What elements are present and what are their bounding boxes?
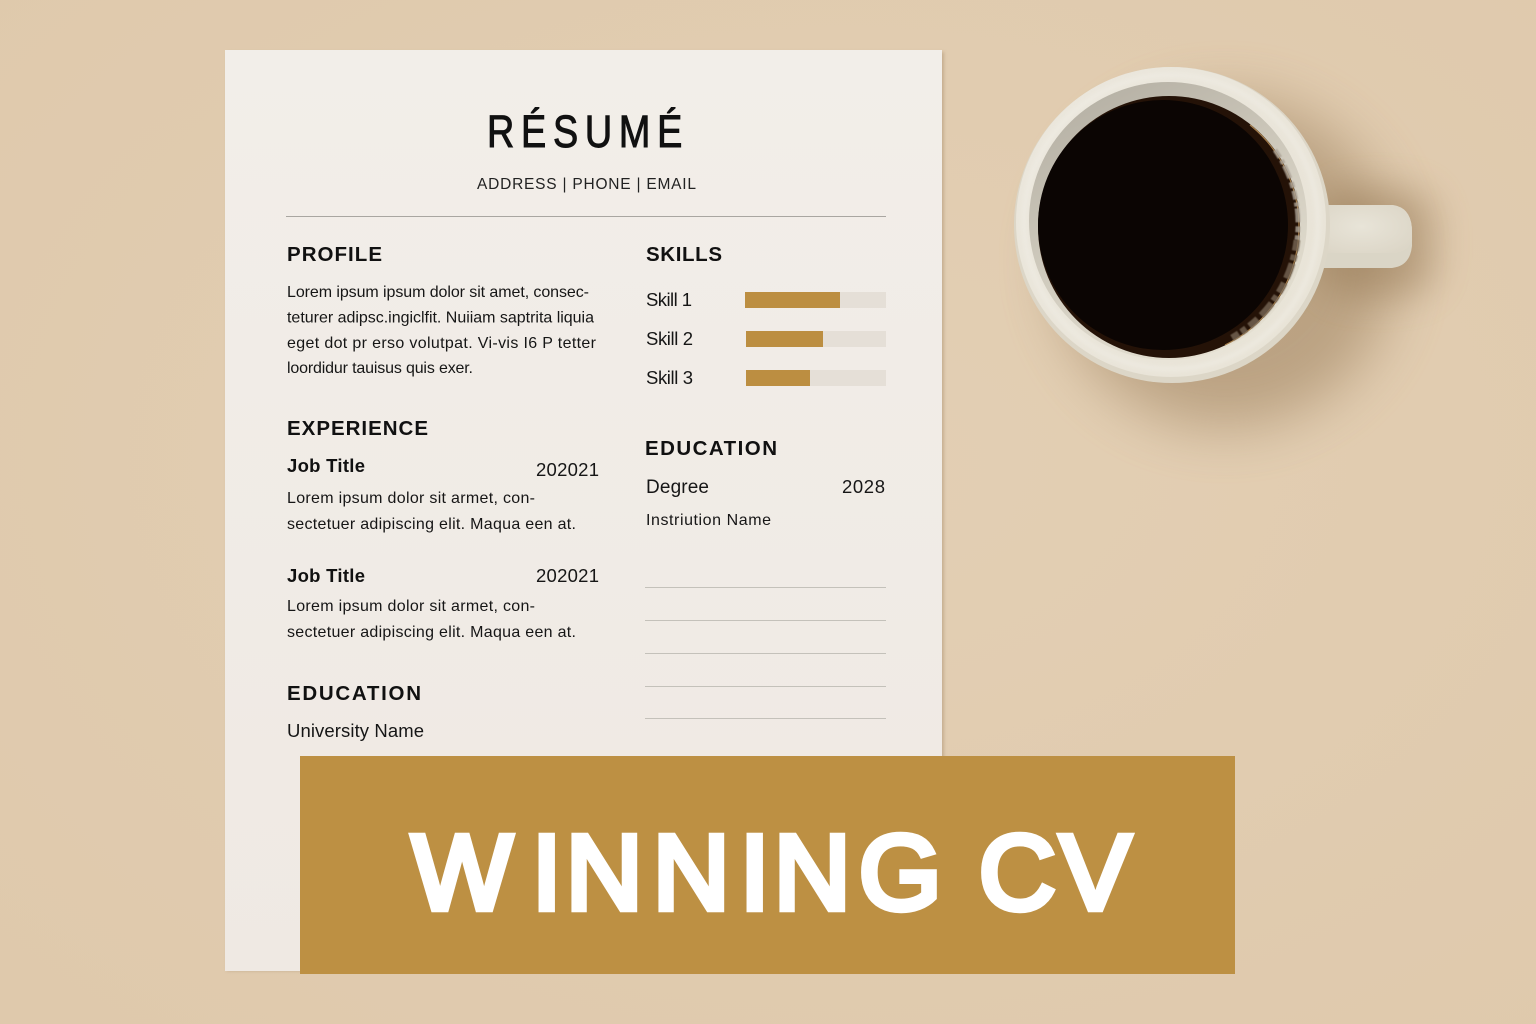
skill 1 bar: Skill 1 [646, 289, 692, 310]
section: experience: 202021 [536, 565, 599, 586]
section: experience [287, 417, 599, 641]
section: education, right: Instriution Name [646, 512, 771, 529]
skill 3 bar: Skill 3 [646, 367, 693, 388]
contact line: ADDRESS | PHONE | EMAIL [477, 176, 696, 193]
cup inner wall [1029, 82, 1307, 360]
coffee surface [1038, 96, 1300, 358]
section: profile: teturer adipsc.ingiclfit. Nuiiam saptrita liquia [287, 310, 594, 326]
section: profile: Lorem ipsum ipsum dolor sit amet, consec- [287, 284, 589, 301]
section: profile: PROFILE [287, 243, 382, 266]
skill 3 bar [646, 367, 886, 388]
skill 2 bar [646, 328, 886, 349]
skill 2 bar: Skill 2 [646, 328, 693, 349]
section: education, left [287, 682, 424, 741]
section: education, right: 2028 [842, 476, 885, 497]
banner title: WINNING CV [412, 814, 1131, 932]
section: education, left: University Name [287, 720, 424, 741]
section: education, right: Degree [646, 477, 709, 498]
section: experience: EXPERIENCE [287, 417, 428, 440]
section: education, right [645, 437, 885, 529]
section: profile [287, 243, 597, 377]
section: experience: sectetuer adipiscing elit. Maqua een at. [287, 624, 576, 641]
section: skills [646, 243, 886, 388]
cup body [1014, 67, 1330, 383]
section: experience: Lorem ipsum dolor sit armet, con- [287, 598, 535, 615]
section: education, right: EDUCATION [645, 437, 777, 460]
section: experience: sectetuer adipiscing elit. Maqua een at. [287, 516, 576, 533]
section: skills: SKILLS [646, 243, 722, 266]
section: education, left: EDUCATION [287, 682, 421, 705]
section: experience: Lorem ipsum dolor sit armet, con- [287, 490, 535, 507]
skill 1 bar [646, 289, 886, 310]
banner [300, 756, 1235, 974]
section: experience: Job Title [287, 565, 365, 586]
section: experience: Job Title [287, 455, 365, 476]
section: profile: loordidur tauisus quis exer. [287, 360, 473, 377]
cup handle [1320, 205, 1412, 268]
blank ruled lines [645, 587, 886, 719]
section: profile: eget dot pr erso volutpat. Vi-vis I6 P tetter [287, 335, 597, 352]
icon: coffee cup seen from above [1014, 67, 1435, 427]
section: experience: 202021 [536, 459, 599, 480]
title: résumé: RÉSUMÉ [487, 106, 689, 157]
panel: résumé sheet [225, 50, 944, 971]
